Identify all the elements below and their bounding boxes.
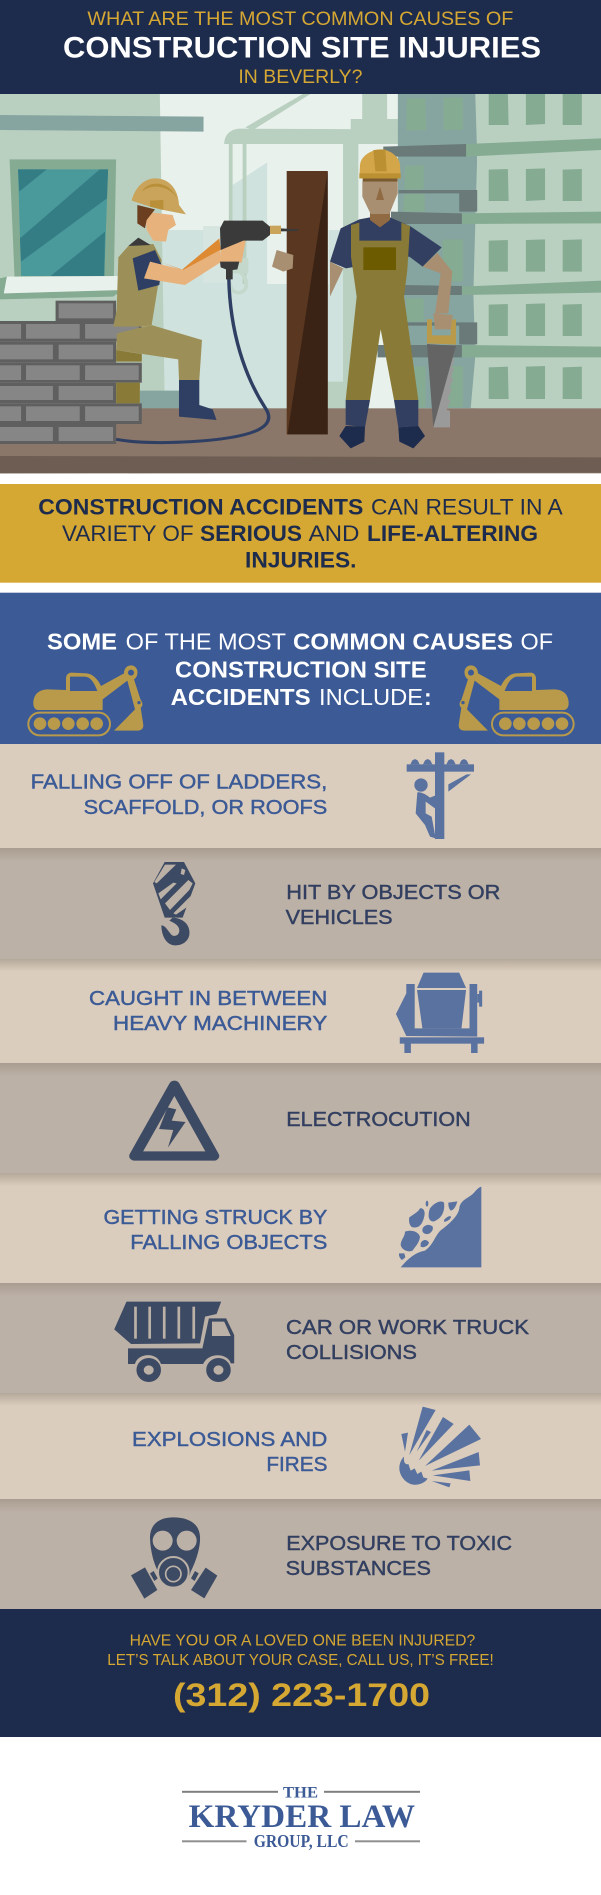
label bbox=[89, 987, 328, 1035]
icon: rockslide bbox=[399, 1187, 481, 1267]
icon: high voltage triangle bbox=[135, 1085, 214, 1156]
line 2: SERIOUS bbox=[200, 521, 302, 546]
panel: explosions and fires bbox=[0, 1393, 601, 1499]
left building bbox=[0, 94, 204, 410]
label: FALLING OFF OF LADDERS, bbox=[31, 770, 327, 793]
label bbox=[286, 1532, 512, 1580]
panel: falling off ladders bbox=[0, 744, 601, 848]
heading text: ACCIDENTS bbox=[171, 684, 311, 710]
label bbox=[286, 1316, 529, 1364]
heading line: what are the most common causes of: WHAT ARE THE MOST COMMON CAUSES OF bbox=[87, 8, 513, 30]
ground bbox=[0, 408, 601, 473]
label bbox=[132, 1428, 327, 1476]
logo: The Kryder Law Group bbox=[182, 1784, 420, 1851]
line 2: AND bbox=[308, 521, 360, 546]
heading text: CONSTRUCTION SITE bbox=[175, 656, 427, 682]
label: HIT BY OBJECTS OR bbox=[286, 881, 500, 904]
label: SUBSTANCES bbox=[286, 1557, 431, 1580]
worker upper body with drill bbox=[113, 178, 298, 327]
label: COLLISIONS bbox=[286, 1341, 417, 1364]
icon: explosion bbox=[399, 1407, 481, 1487]
panel: call to action bbox=[0, 1609, 601, 1737]
worker standing with saw bbox=[330, 149, 456, 448]
heading text bbox=[47, 629, 553, 710]
heading text: OF THE MOST bbox=[126, 629, 286, 655]
illustration: construction workers bbox=[0, 94, 601, 473]
header panel bbox=[0, 0, 601, 94]
brick wall bbox=[0, 301, 142, 444]
plank bbox=[287, 171, 328, 434]
icon: excavator right bbox=[459, 665, 574, 735]
cta question: HAVE YOU OR A LOVED ONE BEEN INJURED? bbox=[130, 1633, 475, 1650]
line 1: CAN RESULT IN A bbox=[371, 495, 563, 520]
panel: construction accidents banner bbox=[0, 484, 601, 583]
label: ELECTROCUTION bbox=[286, 1108, 471, 1131]
label: EXPOSURE TO TOXIC bbox=[286, 1532, 512, 1555]
icon: dump truck bbox=[114, 1302, 234, 1382]
panel: struck by falling objects bbox=[0, 1173, 601, 1283]
heading text: SOME bbox=[47, 629, 117, 655]
heading line: in Beverly: IN BEVERLY? bbox=[238, 66, 363, 88]
line 2 bbox=[62, 521, 538, 546]
worker legs and drill cord bbox=[116, 278, 269, 443]
panel: caught in machinery bbox=[0, 959, 601, 1063]
label: HEAVY MACHINERY bbox=[113, 1012, 328, 1035]
panel: toxic substances bbox=[0, 1499, 601, 1609]
heading text: COMMON CAUSES bbox=[293, 629, 513, 655]
label: SCAFFOLD, OR ROOFS bbox=[84, 796, 327, 819]
panel: hit by objects bbox=[0, 848, 601, 959]
phone number: (312) 223-1700 bbox=[173, 1677, 430, 1713]
logo: The Kryder Law Group: GROUP, LLC bbox=[254, 1831, 349, 1851]
label: GETTING STRUCK BY bbox=[104, 1206, 328, 1229]
label: FALLING OBJECTS bbox=[130, 1231, 327, 1254]
label: EXPLOSIONS AND bbox=[132, 1428, 327, 1451]
background buildings bbox=[378, 94, 601, 408]
panel: truck collisions bbox=[0, 1283, 601, 1393]
label bbox=[104, 1206, 328, 1254]
label bbox=[31, 770, 327, 819]
icon: worker climbing pole bbox=[407, 752, 474, 839]
line 2: LIFE-ALTERING bbox=[367, 521, 538, 546]
icon: crane hook bbox=[153, 862, 195, 945]
logo: The Kryder Law Group: KRYDER LAW bbox=[189, 1799, 415, 1835]
label: VEHICLES bbox=[286, 906, 393, 929]
icon: gas mask bbox=[131, 1517, 217, 1599]
line 1 bbox=[38, 495, 563, 520]
label: CAUGHT IN BETWEEN bbox=[89, 987, 327, 1010]
icon: excavator left bbox=[28, 665, 143, 735]
line 3: INJURIES. bbox=[245, 548, 356, 573]
line 1: CONSTRUCTION ACCIDENTS bbox=[38, 495, 363, 520]
icon: cement mixer bbox=[396, 973, 484, 1053]
heading text: OF bbox=[520, 629, 553, 655]
heading text: : bbox=[424, 684, 432, 710]
line 2: VARIETY OF bbox=[62, 521, 194, 546]
title: CONSTRUCTION SITE INJURIES bbox=[63, 32, 541, 64]
heading text: INCLUDE bbox=[319, 684, 423, 710]
crane background bbox=[203, 94, 399, 410]
label bbox=[286, 881, 500, 929]
panel: common causes heading bbox=[0, 593, 601, 744]
panel: electrocution bbox=[0, 1063, 601, 1173]
label: FIRES bbox=[266, 1453, 327, 1476]
cta invitation: LET’S TALK ABOUT YOUR CASE, CALL US, IT’S FREE! bbox=[107, 1652, 494, 1669]
label: CAR OR WORK TRUCK bbox=[286, 1316, 529, 1339]
logo: The Kryder Law Group: THE bbox=[283, 1784, 318, 1801]
